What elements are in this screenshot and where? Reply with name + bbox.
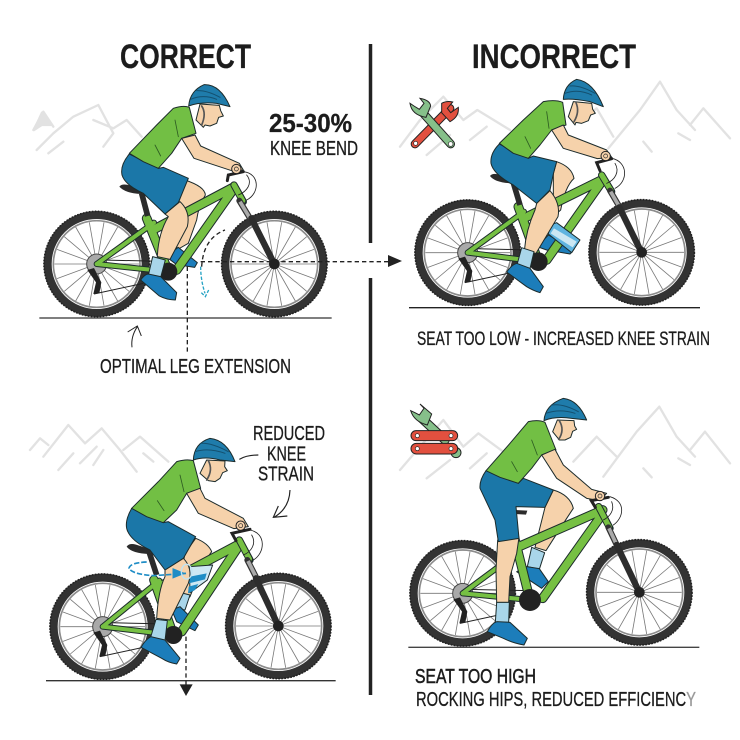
rider near leg	[141, 202, 188, 300]
mountains	[33, 105, 142, 153]
frame	[97, 185, 243, 272]
rider shorts	[126, 508, 196, 570]
knee wrap	[548, 223, 580, 253]
rider arm	[187, 488, 248, 529]
pointer arrow curved	[273, 490, 290, 517]
far leg	[172, 538, 212, 631]
caption: seat too high	[415, 666, 696, 711]
ground line	[408, 645, 699, 649]
helmet	[563, 79, 603, 107]
dashed arrow down	[180, 637, 193, 696]
panel: correct bottom	[30, 425, 336, 696]
frame	[463, 507, 610, 600]
crank	[164, 626, 182, 644]
panel: correct top	[33, 85, 392, 352]
callout: reduced knee strain: KNEE	[267, 444, 306, 466]
saddle	[515, 510, 527, 515]
rider head	[200, 460, 227, 482]
far leg	[517, 490, 573, 588]
mountains	[400, 82, 730, 155]
crank	[519, 589, 541, 611]
rider shorts	[480, 471, 553, 542]
callout: reduced knee strain: REDUCED	[253, 423, 325, 445]
rider arm	[182, 135, 243, 171]
drivetrain	[93, 617, 169, 657]
rider jersey	[499, 101, 566, 158]
handlebar	[227, 164, 243, 181]
fork	[247, 560, 284, 631]
callout: knee bend	[269, 108, 358, 160]
callout: reduced knee strain	[253, 423, 325, 486]
panel: incorrect top	[400, 79, 730, 308]
rider jersey	[132, 460, 201, 523]
cable	[243, 530, 262, 560]
helmet	[544, 398, 587, 421]
rider head	[553, 420, 577, 440]
callout: reduced knee strain: STRAIN	[258, 464, 314, 486]
center divider line	[369, 44, 372, 695]
fork	[610, 191, 647, 258]
front wheel	[589, 200, 694, 305]
icon: multi tool	[411, 404, 461, 458]
frame	[103, 540, 250, 635]
cable	[238, 172, 256, 200]
rider near leg	[507, 191, 559, 293]
dashed arrows	[187, 230, 392, 352]
far leg	[537, 162, 574, 254]
handlebar	[597, 151, 612, 171]
rider head	[196, 104, 223, 127]
front wheel	[226, 573, 331, 679]
caption: seat too high: SEAT TOO HIGH	[415, 666, 536, 688]
pointer from helmet to label	[239, 455, 258, 459]
title: correct: CORRECT	[120, 38, 251, 76]
saddle	[119, 184, 148, 216]
icon: crossed wrenches	[410, 98, 458, 146]
fork	[239, 201, 280, 269]
ground line	[46, 679, 336, 683]
rider head	[568, 102, 595, 125]
crank	[529, 252, 548, 271]
rider jersey	[129, 106, 196, 168]
frame	[468, 175, 612, 262]
arrowhead on horizontal dashed line	[388, 255, 402, 267]
rider shorts	[122, 154, 188, 214]
front wheel	[587, 540, 692, 645]
panel: incorrect bottom	[400, 398, 730, 647]
rider shorts	[491, 144, 557, 203]
teal motion arrow	[201, 267, 209, 297]
callout: knee bend: 25-30%	[269, 108, 352, 138]
mountains	[30, 425, 168, 472]
rear wheel	[410, 541, 515, 646]
crank	[159, 263, 177, 281]
label: optimal leg extension: OPTIMAL LEG EXTENSION	[100, 356, 291, 378]
rider near leg	[487, 537, 527, 645]
cable	[607, 158, 625, 188]
rear wheel	[44, 211, 149, 317]
callout: knee bend: KNEE BEND	[270, 138, 358, 160]
rider arm	[542, 449, 607, 501]
cable	[603, 497, 622, 525]
mountains	[400, 407, 730, 478]
drivetrain	[87, 254, 163, 294]
rear wheel	[50, 574, 155, 679]
handlebar	[591, 491, 608, 507]
helmet	[189, 85, 230, 107]
knee motion ellipse	[129, 562, 192, 579]
handlebar	[232, 521, 250, 541]
pointer arrow	[128, 326, 141, 347]
rider near leg	[141, 558, 190, 664]
title: incorrect: INCORRECT	[472, 38, 636, 76]
rear wheel	[415, 200, 520, 305]
ground line	[39, 316, 332, 320]
saddle	[127, 544, 157, 575]
knee wrap	[188, 565, 213, 593]
drivetrain	[458, 243, 534, 283]
drivetrain	[453, 583, 529, 623]
fork	[608, 527, 645, 598]
rider jersey	[486, 421, 556, 483]
ground line	[409, 306, 700, 310]
helmet	[193, 438, 235, 462]
rider arm	[552, 125, 612, 159]
far leg	[168, 180, 205, 267]
saddle	[490, 174, 520, 205]
front wheel	[222, 211, 327, 317]
